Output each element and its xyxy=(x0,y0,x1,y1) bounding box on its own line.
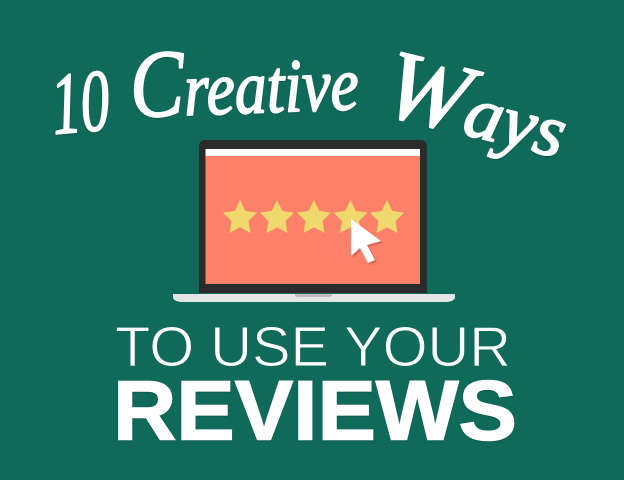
title: 10 Creative Ways xyxy=(47,25,580,179)
laptop screen xyxy=(206,149,420,284)
heading: reviews: REVIEWS xyxy=(113,364,517,458)
cursor shadow xyxy=(353,221,383,265)
five star rating xyxy=(223,200,404,233)
laptop notch xyxy=(295,294,332,297)
title: 10 Creative Ways: Creative xyxy=(128,25,360,139)
laptop lid xyxy=(199,140,427,293)
laptop base xyxy=(173,294,455,302)
cursor arrow xyxy=(351,219,381,263)
title: 10 Creative Ways: Ways xyxy=(374,28,580,179)
title: 10 Creative Ways: 10 xyxy=(47,53,114,154)
browser bar xyxy=(206,149,420,156)
subtitle: to use your: TO USE YOUR xyxy=(115,315,511,378)
icon: laptop with star rating xyxy=(173,140,455,302)
